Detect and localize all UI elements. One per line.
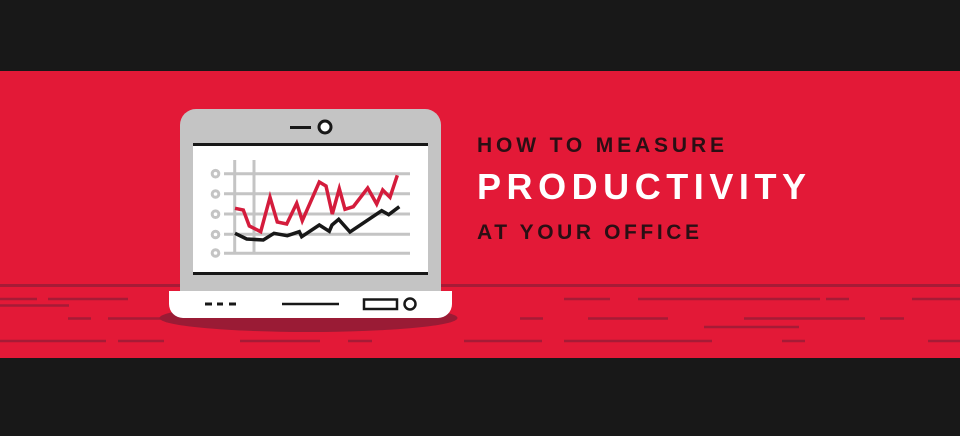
line chart — [212, 160, 410, 256]
laptop screen — [193, 144, 428, 274]
panel: red band — [0, 71, 960, 358]
black data line — [235, 207, 399, 240]
heading line 3: AT YOUR OFFICE — [477, 221, 699, 244]
title block — [477, 134, 806, 244]
base port — [364, 300, 397, 309]
base power button — [404, 298, 416, 310]
heading line 1: HOW TO MEASURE — [477, 134, 724, 157]
chart axis dots — [212, 170, 219, 256]
base indicator dashes — [205, 302, 236, 306]
heading line 2: PRODUCTIVITY — [477, 166, 806, 207]
laptop base — [169, 291, 452, 318]
laptop shadow — [160, 304, 458, 332]
laptop lid — [180, 109, 441, 292]
base trackpad line — [282, 303, 339, 305]
laptop illustration — [160, 109, 458, 332]
laptop webcam — [290, 121, 331, 133]
chart grid — [224, 160, 410, 254]
red data line — [235, 175, 397, 232]
